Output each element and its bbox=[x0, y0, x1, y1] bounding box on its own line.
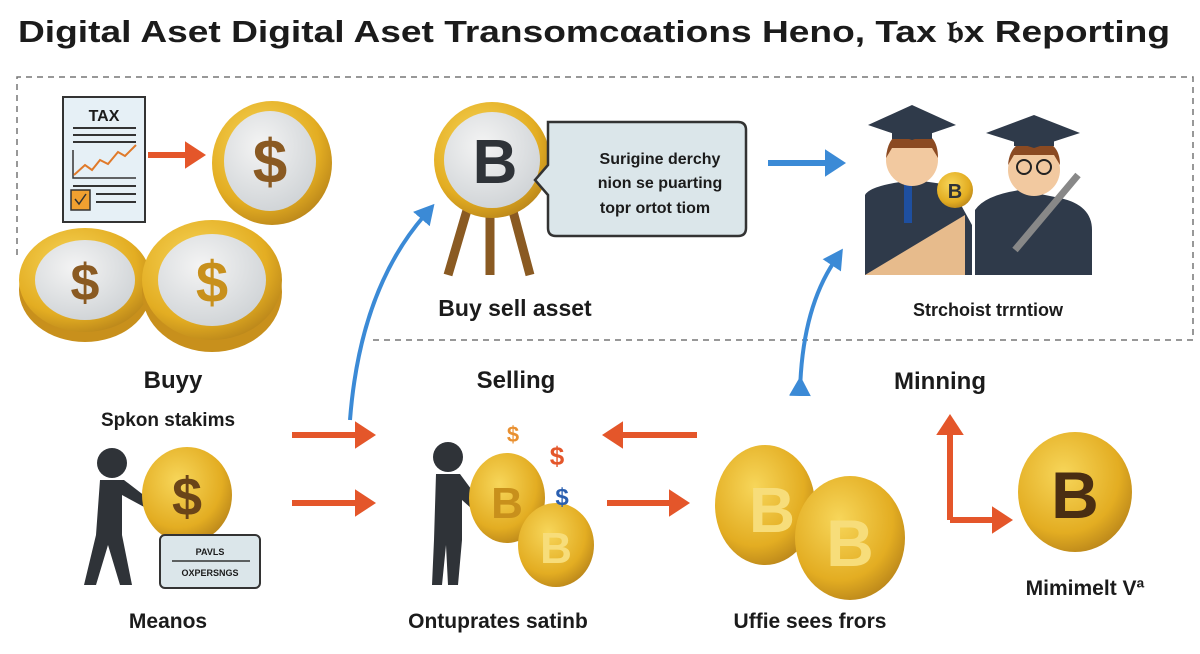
arrow: blue double bbox=[800, 262, 834, 392]
icon: person with coin bbox=[84, 447, 260, 588]
icon: dollar coin top: $ bbox=[253, 128, 287, 197]
arrow: blue curve up bbox=[350, 216, 424, 420]
icon: person selling coins: $ bbox=[550, 441, 565, 471]
icon: bitcoin easel: B bbox=[473, 128, 517, 197]
arrow: blue right bbox=[768, 160, 828, 166]
icon: bitcoin pair: B bbox=[749, 474, 795, 546]
icon: bitcoin pair: B bbox=[826, 506, 874, 580]
heading: buyy: Buyy bbox=[144, 367, 203, 394]
callout: speech box: topr ortot tiom bbox=[600, 200, 710, 217]
text: meanos: Meanos bbox=[129, 610, 207, 633]
text: ontuprates: Ontuprates satinb bbox=[408, 610, 588, 633]
icon: bitcoin easel bbox=[434, 102, 550, 275]
label: strchoist: Strchoist trrntiow bbox=[913, 300, 1064, 320]
arrow: tax to coin bbox=[148, 152, 188, 158]
heading: selling: Selling bbox=[477, 367, 555, 394]
icon: person selling coins: $ bbox=[507, 422, 519, 447]
callout: speech box: Surigine derchy bbox=[600, 151, 721, 168]
callout: speech box: nion se puarting bbox=[598, 175, 722, 192]
callout: speech box bbox=[535, 122, 746, 236]
icon: two dollar coins bbox=[19, 220, 282, 352]
icon: person selling coins: B bbox=[540, 524, 572, 573]
icon: tax document bbox=[63, 97, 145, 222]
icon: person selling coins: $ bbox=[555, 484, 569, 511]
arrows: orange bbox=[292, 432, 995, 520]
icon: person selling coins: B bbox=[491, 479, 523, 528]
icon: graduates: B bbox=[948, 181, 962, 203]
heading: minning: Minning bbox=[894, 368, 986, 395]
title: Digital Aset Digital Aset Transomcαations Heno, Tax 𝔟x Reporting bbox=[18, 14, 1170, 49]
label: buy sell asset: Buy sell asset bbox=[438, 295, 592, 321]
text: spkon: Spkon stakims bbox=[101, 410, 235, 431]
icon: person with coin: $ bbox=[172, 467, 202, 527]
icon: dollar coin top bbox=[212, 101, 332, 225]
icon: tax document: TAX bbox=[89, 108, 120, 125]
icon: person selling coins bbox=[432, 422, 594, 587]
icon: person with coin: OXPERSNGS bbox=[181, 568, 239, 578]
icon: two dollar coins: $ bbox=[71, 254, 100, 312]
icon: bitcoin pair bbox=[715, 445, 905, 600]
icon: bitcoin single bbox=[1018, 432, 1132, 552]
icon: person with coin: PAVLS bbox=[196, 547, 224, 557]
icon: bitcoin single: B bbox=[1051, 458, 1099, 532]
text: uffie: Uffie sees frors bbox=[734, 610, 886, 633]
text: mimimelt: Mimimelt Vª bbox=[1026, 577, 1145, 600]
icon: graduates bbox=[865, 105, 1092, 275]
icon: two dollar coins: $ bbox=[196, 250, 228, 315]
